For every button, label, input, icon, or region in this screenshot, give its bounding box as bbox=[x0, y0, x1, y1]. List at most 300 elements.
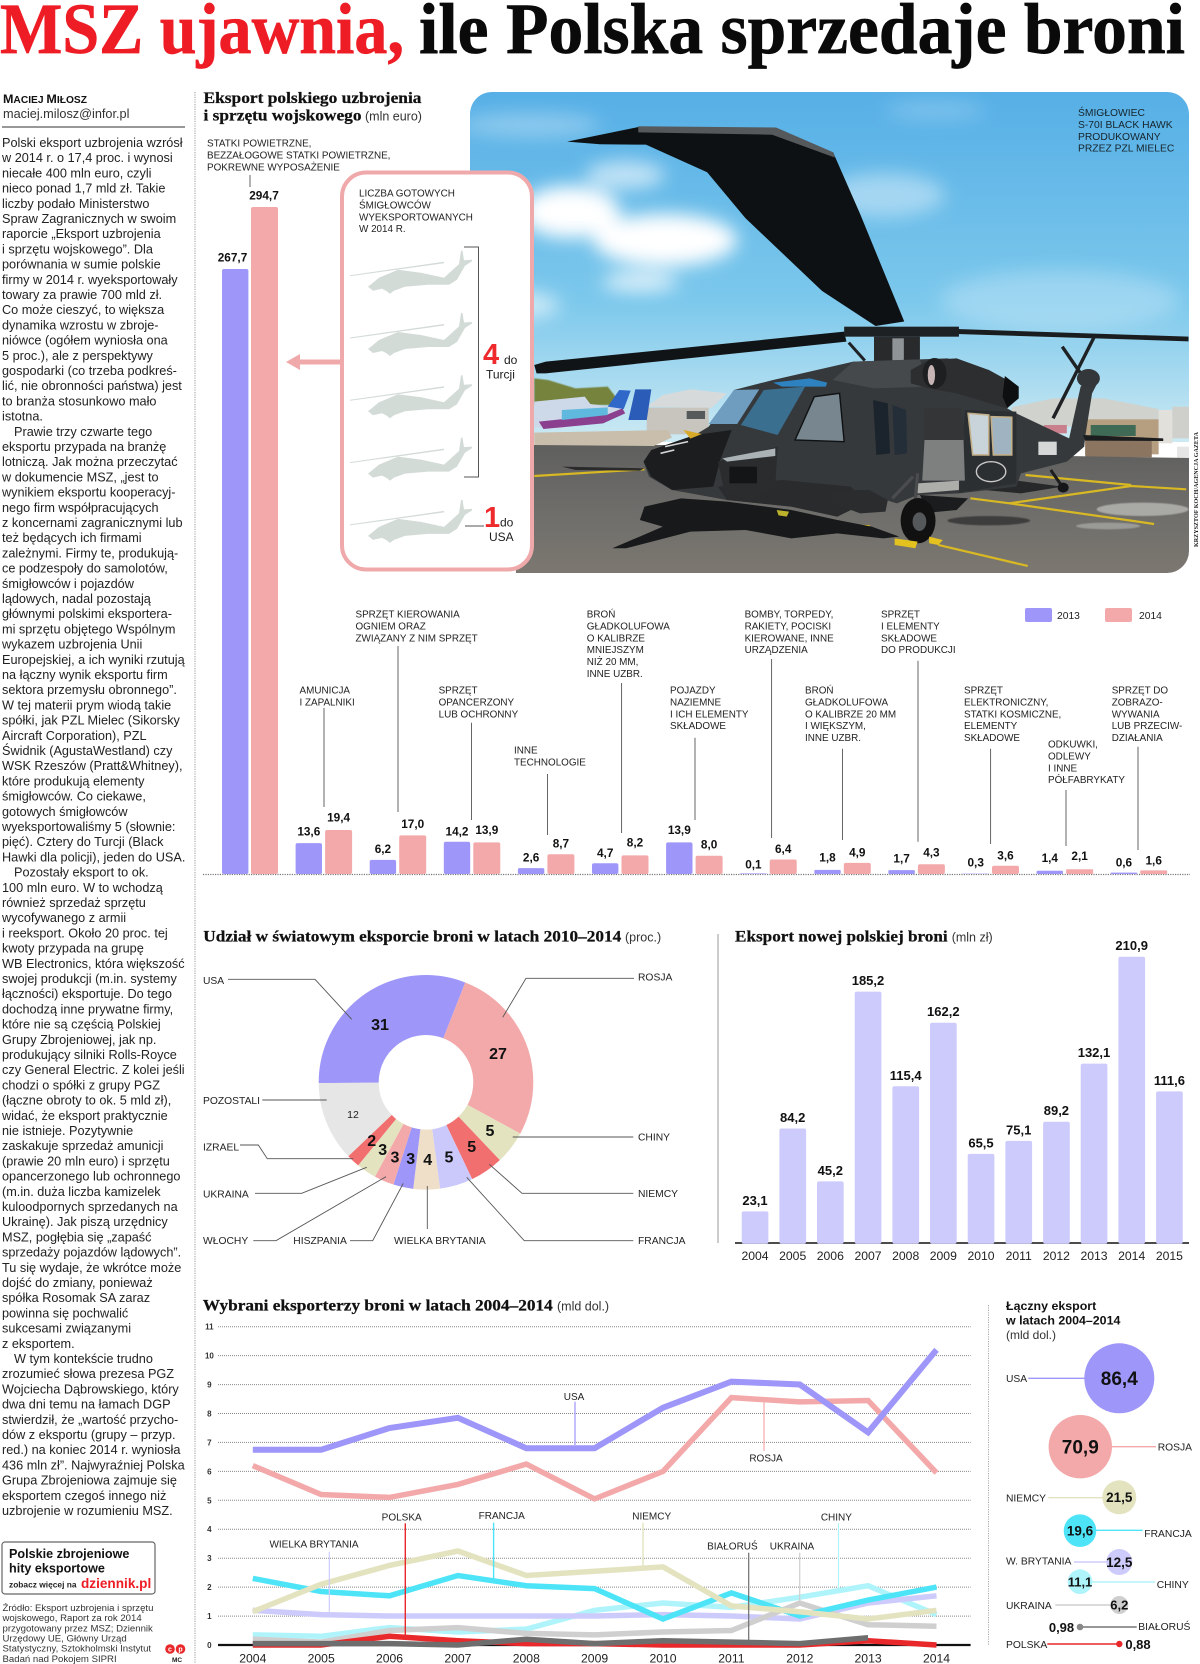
group: production bbox=[881, 610, 956, 874]
article text: też będących ich firmami bbox=[2, 531, 142, 545]
fuselage bbox=[644, 358, 1099, 517]
legend: 2013 bbox=[1057, 611, 1080, 622]
bubble: UK: W. BRYTANIA bbox=[1006, 1556, 1072, 1568]
bar chart: yearly export: 2005 bbox=[779, 1249, 806, 1263]
source note: Urzędowy UE, Główny Urząd bbox=[2, 1633, 127, 1644]
group: electronics: SKŁADOWE bbox=[964, 733, 1020, 744]
y axis and grid: 11 bbox=[205, 1322, 214, 1332]
article text: kwoty przypada na grupę bbox=[2, 942, 144, 956]
group: bombs: 0,1 bbox=[745, 857, 762, 871]
group: electronics: STATKI KOSMICZNE, bbox=[964, 709, 1061, 720]
group: armoured: LUB OCHRONNY bbox=[439, 709, 519, 720]
series: labels: FRANCJA bbox=[479, 1511, 525, 1522]
bar chart: yearly export bbox=[735, 938, 1189, 1263]
bar chart: yearly export: 89,2 bbox=[1044, 1103, 1069, 1118]
article text: (m.in. duża liczba kamizelek bbox=[2, 1185, 161, 1199]
donut values: 3 bbox=[391, 1150, 400, 1166]
article text: Świdnik (AgustaWestland) czy bbox=[2, 743, 173, 758]
article text: dochodzą inne prywatne firmy, bbox=[2, 1002, 173, 1016]
bubble: UK bbox=[1006, 1549, 1133, 1575]
photo credit: KRZYSZTOF KOCH/AGENCJA GAZETA bbox=[1193, 432, 1200, 547]
bar chart: yearly export: 162,2 bbox=[927, 1004, 960, 1019]
series: labels bbox=[269, 1392, 852, 1640]
series: lines bbox=[253, 1350, 937, 1645]
bar chart: yearly export: 2011 bbox=[1006, 1249, 1032, 1263]
group: other tech bbox=[514, 746, 586, 874]
bar chart: yearly export: 23,1 bbox=[742, 1193, 768, 1208]
bubble: China: 11,1 bbox=[1068, 1574, 1092, 1589]
article text: spółki, jak PZL Mielec (Sikorsky bbox=[2, 714, 181, 728]
y axis and grid: 1 bbox=[207, 1612, 212, 1621]
group: forgings: I INNE bbox=[1048, 763, 1077, 774]
bubble: Belarus: 0,98 bbox=[1049, 1620, 1074, 1635]
label: aircraft: STATKI POWIETRZNE, bbox=[207, 138, 311, 150]
group: armoured: 13,9 bbox=[475, 823, 499, 837]
group: production: 1,7 bbox=[893, 851, 910, 865]
group: bombs: URZĄDZENIA bbox=[745, 645, 808, 656]
group: imaging: 1,6 bbox=[1145, 854, 1162, 868]
group: small calibre: BROŃ bbox=[587, 610, 615, 620]
label: 1 to USA bbox=[465, 502, 514, 544]
heading: total export bbox=[1005, 1299, 1120, 1342]
label: 4 to Turkey: Turcji bbox=[486, 368, 515, 382]
article text: Grupy Zbrojeniowej, jak np. bbox=[2, 1033, 156, 1047]
shadows bbox=[612, 498, 899, 548]
photo: black hawk helicopter bbox=[460, 92, 1200, 583]
bubble: Ukraine: UKRAINA bbox=[1006, 1601, 1052, 1612]
group: land vehicles bbox=[666, 686, 749, 874]
callout: dziennik.pl: Polskie zbrojeniowe bbox=[9, 1547, 129, 1561]
ground bbox=[516, 445, 1200, 583]
article text: wycofywanego z armii bbox=[1, 911, 126, 925]
copyright icons bbox=[165, 1644, 185, 1664]
article text: WSK Rzeszów (Pratt&Whitney), bbox=[2, 759, 182, 773]
article text: wyeksportowaliśmy 5 (słownie: bbox=[1, 820, 175, 834]
donut labels: USA bbox=[203, 976, 224, 987]
article text: istotna. bbox=[2, 410, 43, 424]
article text: i reeksport. Około 20 proc. tej bbox=[2, 926, 168, 940]
group: large calibre: 1,8 bbox=[819, 851, 836, 865]
group: other tech: 2,6 bbox=[523, 851, 540, 865]
donut values: 2 bbox=[367, 1133, 376, 1150]
inset heading: ŚMIGŁOWCÓW bbox=[359, 199, 432, 211]
series: labels: NIEMCY bbox=[632, 1512, 671, 1522]
group: electronics: ELEMENTY bbox=[964, 721, 1018, 732]
bubble: Russia bbox=[1049, 1415, 1192, 1478]
bubble: Russia: ROSJA bbox=[1158, 1442, 1192, 1454]
donut values: 4 bbox=[423, 1152, 432, 1169]
photo caption: S-70I BLACK HAWK bbox=[1078, 120, 1173, 131]
source note: wojskowego, Raport za rok 2014 bbox=[2, 1613, 142, 1624]
bubble: Poland bbox=[1006, 1637, 1151, 1652]
donut labels: FRANCJA bbox=[638, 1236, 686, 1247]
donut values: 31 bbox=[371, 1017, 389, 1034]
series: labels: UKRAINA bbox=[770, 1542, 815, 1552]
group: ammunition bbox=[296, 686, 355, 874]
article text: swojej produkcji (m.in. systemy bbox=[2, 972, 178, 986]
photo caption: ŚMIGŁOWIEC bbox=[1078, 106, 1145, 119]
y axis and grid: 5 bbox=[207, 1496, 212, 1506]
bubble: Ukraine bbox=[1006, 1596, 1128, 1614]
group: armoured: OPANCERZONY bbox=[439, 697, 515, 708]
heading: export bbox=[204, 90, 422, 124]
x axis years bbox=[239, 1652, 950, 1664]
bubble: China: CHINY bbox=[1157, 1580, 1189, 1591]
article text: (łączne obroty to ok. 5 mld zł), bbox=[2, 1094, 171, 1108]
article text: kuloodpornych sprzedanych na bbox=[2, 1200, 179, 1214]
series: labels: WIELKA BRYTANIA bbox=[269, 1540, 359, 1550]
copyright icons: MC bbox=[172, 1657, 182, 1664]
bar chart: yearly export: 2006 bbox=[817, 1249, 844, 1263]
article text: pięć). Cztery do Turcji (Black bbox=[2, 835, 164, 849]
article text: Grupa Zbrojeniowa zajmuje się bbox=[2, 1474, 177, 1488]
bubble: Poland: 0,88 bbox=[1125, 1637, 1151, 1652]
label: 4 to Turkey: 4 bbox=[483, 339, 499, 371]
label: 4 to Turkey: do bbox=[504, 353, 518, 367]
group: land vehicles: SKŁADOWE bbox=[670, 721, 726, 732]
article text: liczby podało Ministerstwo bbox=[2, 197, 149, 211]
article text: Polski eksport uzbrojenia wzrósł bbox=[2, 136, 183, 150]
y axis and grid: 3 bbox=[207, 1554, 212, 1563]
article text: dwa dni temu na łamach DGP bbox=[2, 1398, 171, 1412]
article text: wynikiem eksportu kooperacyj- bbox=[1, 486, 175, 500]
article text: MSZ, pogłębia się „zapaść bbox=[2, 1230, 152, 1244]
article text: towary za prawie 700 mld zł. bbox=[2, 288, 162, 302]
group: production: SPRZĘT bbox=[881, 610, 920, 620]
sponson and wheels bbox=[851, 490, 888, 514]
article text: to branża stosunkowo mało bbox=[2, 394, 156, 408]
bar chart: yearly export: 132,1 bbox=[1078, 1045, 1110, 1060]
group: forgings: 2,1 bbox=[1071, 849, 1088, 863]
article text: 5 proc.), ale z perspektywy bbox=[2, 349, 154, 363]
article text: które nie są częścią Polskiej bbox=[2, 1018, 161, 1032]
bubble: France bbox=[1064, 1514, 1192, 1547]
article text: śmigłowców i pojazdów bbox=[2, 577, 135, 591]
group: imaging: DZIAŁANIA bbox=[1112, 733, 1163, 744]
article text: niówce (ogółem wyniosła ona bbox=[2, 334, 169, 348]
heading: total export: (mld dol.) bbox=[1006, 1328, 1056, 1342]
group: small calibre: INNE UZBR. bbox=[587, 669, 643, 680]
article text: wykazem uzbrojenia Unii bbox=[1, 638, 142, 652]
group: small calibre: 8,2 bbox=[627, 836, 644, 850]
article text: mi sprzętu objętego Wspólnym bbox=[2, 622, 175, 636]
callout: dziennik.pl: hity eksportowe bbox=[9, 1562, 105, 1576]
group: large calibre: INNE UZBR. bbox=[805, 733, 861, 744]
article text: i sprzętu wojskowego”. Dla bbox=[2, 242, 154, 256]
bar chart: yearly export: 185,2 bbox=[852, 973, 884, 988]
donut labels: UKRAINA bbox=[203, 1190, 249, 1200]
arrow bbox=[286, 354, 340, 370]
inset heading: LICZBA GOTOWYCH bbox=[359, 188, 455, 200]
series: labels: BIAŁORUŚ bbox=[707, 1540, 758, 1552]
group: electronics: 3,6 bbox=[997, 848, 1014, 862]
group: electronics: 0,3 bbox=[967, 856, 984, 870]
article text: nieco ponad 1,7 mld zł. Takie bbox=[2, 182, 165, 196]
heading: new arms: Eksport nowej polskiej broni bbox=[735, 929, 948, 946]
article text: Ukrainę). Jak piszą urzędnicy bbox=[2, 1215, 168, 1229]
group: land vehicles: I ICH ELEMENTY bbox=[670, 709, 749, 720]
article text: spółka Rosomak SA zaraz bbox=[2, 1291, 150, 1305]
bar chart: yearly export: 111,6 bbox=[1154, 1073, 1185, 1088]
y axis and grid: 10 bbox=[205, 1352, 214, 1360]
group: small calibre bbox=[587, 610, 670, 874]
label: 1 to USA: USA bbox=[489, 530, 514, 544]
article text: porównania w sumie polskie bbox=[2, 258, 161, 272]
bubble: France: 19,6 bbox=[1067, 1524, 1094, 1538]
group: large calibre bbox=[805, 686, 896, 874]
heading: total export: Łączny eksport bbox=[1006, 1299, 1096, 1313]
callout: dziennik.pl bbox=[2, 1542, 155, 1594]
group: fire control: SPRZĘT KIEROWANIA bbox=[356, 610, 460, 620]
group: other tech: 8,7 bbox=[553, 836, 570, 850]
bubble: USA: 86,4 bbox=[1101, 1369, 1138, 1390]
y axis and grid bbox=[205, 1322, 971, 1650]
article text: chodzi o spółki z grupy PGZ bbox=[2, 1078, 160, 1092]
label: 1 to USA: 1 bbox=[484, 502, 500, 534]
article text: Spraw Zagranicznych w swoim bbox=[2, 212, 176, 226]
bubble: Germany: 21,5 bbox=[1106, 1490, 1133, 1505]
article text: dojść do zmiany, ponieważ bbox=[2, 1276, 153, 1290]
article text: lić, nie obronności państwa) jest bbox=[2, 379, 182, 393]
source note: Statystyczny, Sztokholmski Instytut bbox=[2, 1644, 151, 1655]
panel: selected exporters line chart bbox=[203, 1298, 971, 1664]
article text: firmy w 2014 r. wyeksportowały bbox=[2, 273, 178, 287]
article text: opancerzonego lub ochronnego bbox=[2, 1170, 180, 1184]
bar chart: yearly export: 2004 bbox=[741, 1249, 769, 1263]
article text: zrozumieć słowa prezesa PGZ bbox=[2, 1367, 174, 1381]
heading: world share: (proc.) bbox=[625, 931, 661, 945]
article text: lądowych, nadal pozostają bbox=[2, 592, 152, 606]
group: fire control: 6,2 bbox=[375, 842, 392, 856]
article text: eksportem czegoś innego niż bbox=[2, 1489, 166, 1503]
article text: gotowych śmigłowców bbox=[2, 805, 128, 819]
group: forgings: PÓŁFABRYKATY bbox=[1048, 775, 1125, 786]
donut labels: ROSJA bbox=[638, 972, 672, 984]
article text: Europejskiej, a ich wyniki rzutują bbox=[2, 653, 186, 667]
article text: W tym kontekście trudno bbox=[14, 1352, 153, 1366]
heading: world share: Udział w światowym eksporcie broni w latach 2010–2014 bbox=[203, 929, 622, 946]
source note: Źródło: Eksport uzbrojenia i sprzętu bbox=[2, 1603, 153, 1614]
donut values: 27 bbox=[489, 1046, 507, 1063]
y axis and grid: 4 bbox=[207, 1525, 212, 1534]
heading: selected exporters: Wybrani eksporterzy broni w latach 2004–2014 bbox=[203, 1298, 553, 1315]
article text: (prawie 20 mln euro) i sprzętu bbox=[2, 1154, 170, 1168]
article text: Wojciecha Dąbrowskiego, który bbox=[2, 1382, 179, 1396]
y axis and grid: 0 bbox=[207, 1641, 212, 1650]
article text: śmigłowców. Co ciekawe, bbox=[2, 790, 146, 804]
bars: aircraft: 267,7 bbox=[218, 250, 248, 264]
leader: aircraft bbox=[249, 175, 251, 187]
article text: Aircraft Corporation), PZL bbox=[2, 729, 147, 743]
bubble: USA bbox=[1006, 1343, 1154, 1413]
donut values: 5 bbox=[467, 1139, 476, 1156]
label: 4 to Turkey bbox=[483, 339, 518, 382]
group: small calibre: GŁADKOLUFOWA bbox=[587, 621, 670, 632]
article text: również sprzedaż sprzętu bbox=[2, 896, 146, 910]
bar chart: yearly export: 210,9 bbox=[1115, 938, 1148, 953]
bar chart: yearly export: 84,2 bbox=[780, 1110, 805, 1125]
donut values: 5 bbox=[486, 1123, 495, 1140]
bars: aircraft: 294,7 bbox=[249, 188, 279, 202]
bar chart: yearly export: 2008 bbox=[892, 1249, 919, 1263]
group: electronics bbox=[962, 686, 1061, 874]
article text: w 2014 r. o 17,4 proc. i wynosi bbox=[1, 151, 173, 165]
group: bombs: KIEROWANE, INNE bbox=[745, 633, 834, 644]
group: land vehicles: 8,0 bbox=[701, 837, 718, 851]
article text: stwierdził, że „wartość przycho- bbox=[2, 1413, 178, 1427]
group: fire control: ZWIĄZANY Z NIM SPRZĘT bbox=[356, 633, 478, 644]
donut chart bbox=[349, 1005, 503, 1160]
article text: które produkują elementy bbox=[2, 774, 145, 788]
article text: na łączny wynik eksportu firm bbox=[2, 668, 168, 682]
article text: głównymi polskimi eksportera- bbox=[2, 607, 172, 621]
bar chart: yearly export: 115,4 bbox=[890, 1068, 922, 1083]
group: bombs: BOMBY, TORPEDY, bbox=[745, 610, 833, 620]
panel: new polish arms export bbox=[735, 929, 1189, 1263]
article text: czy General Electric. Z kolei jeśli bbox=[2, 1063, 185, 1077]
donut values: 5 bbox=[445, 1150, 454, 1166]
group: imaging bbox=[1111, 686, 1182, 874]
inset heading: W 2014 R. bbox=[359, 224, 406, 235]
article text: sukcesami związanymi bbox=[2, 1322, 131, 1336]
source note: przygotowany przez MSZ; Dziennik bbox=[2, 1623, 153, 1634]
article text: Tu się wydaje, że wkrótce może bbox=[2, 1261, 181, 1275]
group: land vehicles: NAZIEMNE bbox=[670, 697, 721, 708]
article text: dynamika wzrostu w zbroje- bbox=[2, 318, 159, 332]
group: large calibre: I WIĘKSZYM, bbox=[805, 721, 866, 732]
group: fire control bbox=[356, 610, 478, 874]
markings bbox=[938, 545, 1028, 566]
donut values: 3 bbox=[378, 1142, 387, 1159]
article text: uzbrojenie w rozumieniu MSZ. bbox=[2, 1504, 173, 1518]
group: armoured: SPRZĘT bbox=[439, 686, 478, 696]
rotor blades bbox=[534, 332, 846, 373]
group: production: SKŁADOWE bbox=[881, 633, 937, 644]
donut labels: NIEMCY bbox=[638, 1189, 678, 1200]
group: production: I ELEMENTY bbox=[881, 621, 940, 632]
copyright icons: c bbox=[168, 1646, 172, 1654]
group: armoured bbox=[439, 686, 519, 874]
bar chart: export by category bbox=[203, 138, 1190, 874]
helicopter scene bbox=[516, 327, 1200, 583]
author byline: maciej.milosz@infor.pl bbox=[3, 107, 129, 121]
label: aircraft: POKREWNE WYPOSAŻENIE bbox=[207, 162, 340, 174]
group: production: DO PRODUKCJI bbox=[881, 645, 956, 656]
group: bombs: RAKIETY, POCISKI bbox=[745, 621, 831, 632]
photo caption: PRZEZ PZL MIELEC bbox=[1078, 144, 1175, 155]
group: imaging: SPRZĘT DO bbox=[1112, 686, 1168, 696]
article text: powinna się pochwalić bbox=[2, 1306, 129, 1320]
bubble: China bbox=[1068, 1569, 1189, 1594]
article text: dów z eksportu (grupy – przyp. bbox=[2, 1428, 175, 1442]
donut values: 12 bbox=[347, 1109, 359, 1121]
article text: nie istnieje. Pozytywnie bbox=[2, 1124, 133, 1138]
bar chart: yearly export: 2012 bbox=[1043, 1249, 1070, 1263]
article text: łączności) eksportuje. Do tego bbox=[2, 987, 172, 1001]
donut labels: CHINY bbox=[638, 1132, 670, 1144]
group: bombs: 6,4 bbox=[775, 842, 792, 856]
article text: Pozostały eksport to ok. bbox=[14, 866, 149, 880]
article text: zaskakuje sprzedaż amunicji bbox=[2, 1139, 164, 1153]
heading: export: i sprzętu wojskowego bbox=[204, 108, 362, 124]
bubble: Belarus bbox=[1049, 1620, 1191, 1635]
legend: 2014 bbox=[1139, 611, 1162, 622]
article text: Co może cieszyć, to większa bbox=[2, 303, 165, 317]
group: small calibre: NIŻ 20 MM, bbox=[587, 657, 638, 668]
article text: Hawki dla policji), jeden do USA. bbox=[2, 850, 185, 864]
article text: z koncernami zagranicznymi lub bbox=[2, 516, 183, 530]
group: large calibre: 4,9 bbox=[849, 846, 866, 860]
series: labels: CHINY bbox=[821, 1512, 852, 1524]
bubble: Germany: NIEMCY bbox=[1006, 1494, 1046, 1504]
bar chart: yearly export: 2007 bbox=[854, 1249, 882, 1263]
donut values bbox=[347, 1017, 507, 1169]
heading: total export: w latach 2004–2014 bbox=[1005, 1313, 1120, 1327]
heading: selected exporters: (mld dol.) bbox=[557, 1300, 609, 1314]
article text: red.) na koniec 2014 r. wyniosła bbox=[2, 1443, 181, 1457]
group: large calibre: BROŃ bbox=[805, 686, 834, 696]
group: imaging: LUB PRZECIW- bbox=[1112, 721, 1182, 732]
group: production: 4,3 bbox=[923, 846, 940, 860]
group: forgings bbox=[1037, 740, 1125, 874]
group: ammunition: 13,6 bbox=[297, 824, 321, 838]
article text: z eksportem. bbox=[2, 1337, 75, 1351]
article text: w dokumencie MSZ, „jest to bbox=[1, 470, 159, 484]
group: large calibre: O KALIBRZE 20 MM bbox=[805, 709, 896, 720]
article text: zależnymi. Firmy te, produkują- bbox=[2, 546, 178, 560]
article text: produkujący silniki Rolls-Royce bbox=[2, 1048, 177, 1062]
heading: export: (mln euro) bbox=[365, 110, 422, 124]
group: bombs bbox=[740, 610, 834, 874]
panel: total export bubbles bbox=[1005, 1299, 1192, 1652]
group: large calibre: GŁADKOLUFOWA bbox=[805, 697, 888, 708]
icons: helicopters bbox=[350, 251, 472, 543]
label: aircraft: BEZZAŁOGOWE STATKI POWIETRZNE, bbox=[207, 150, 390, 162]
group: land vehicles: POJAZDY bbox=[670, 686, 716, 696]
group: imaging: ZOBRAZO- bbox=[1112, 697, 1163, 708]
big rotor blade bbox=[567, 126, 904, 326]
donut values: 3 bbox=[406, 1151, 415, 1168]
donut labels: WIELKA BRYTANIA bbox=[394, 1236, 486, 1247]
group: electronics: SPRZĘT bbox=[964, 686, 1003, 696]
bars: aircraft bbox=[218, 188, 279, 874]
bubble: Poland: POLSKA bbox=[1006, 1640, 1047, 1651]
bubble: USA: USA bbox=[1006, 1374, 1027, 1385]
y axis and grid: 9 bbox=[207, 1380, 212, 1390]
article text: 100 mln euro. W to wchodzą bbox=[2, 881, 164, 895]
bubble: Belarus: BIAŁORUŚ bbox=[1138, 1620, 1191, 1633]
article text: WB Electronics, która większość bbox=[2, 957, 185, 971]
bar chart: yearly export: 2013 bbox=[1080, 1249, 1108, 1263]
group: ammunition: AMUNICJA bbox=[300, 686, 350, 696]
group: other tech: INNE bbox=[514, 746, 538, 756]
group: fire control: OGNIEM ORAZ bbox=[356, 621, 426, 632]
article text: gospodarki (co trzeba podkreś- bbox=[2, 364, 177, 378]
y axis and grid: 8 bbox=[207, 1410, 212, 1418]
group: electronics: ELEKTRONICZNY, bbox=[964, 697, 1048, 708]
group: small calibre: 4,7 bbox=[597, 846, 614, 860]
bar chart: yearly export: 2010 bbox=[967, 1249, 995, 1263]
bubble: France: FRANCJA bbox=[1144, 1529, 1192, 1540]
inset: exported helicopters bbox=[342, 172, 532, 570]
group: other tech: TECHNOLOGIE bbox=[514, 757, 586, 768]
group: imaging: WYWANIA bbox=[1112, 709, 1160, 720]
group: fire control: 17,0 bbox=[401, 817, 425, 831]
donut labels bbox=[203, 972, 686, 1247]
y axis and grid: 6 bbox=[207, 1468, 212, 1476]
group: imaging: 0,6 bbox=[1116, 856, 1133, 870]
bubble: Germany bbox=[1006, 1480, 1136, 1514]
